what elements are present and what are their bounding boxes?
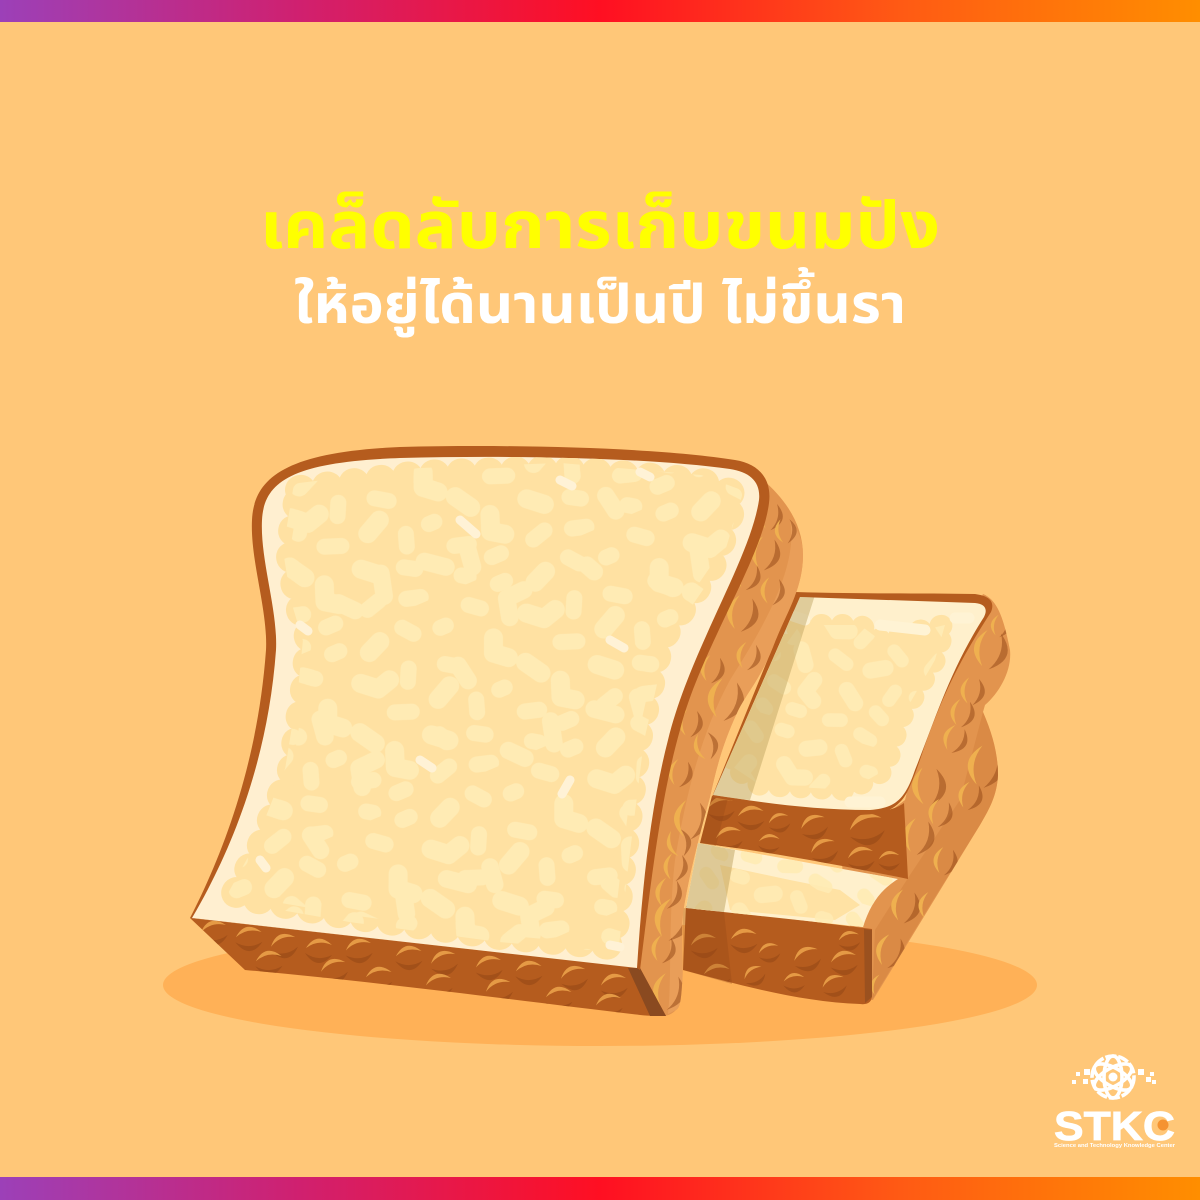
front slice crumb <box>235 470 735 947</box>
title <box>260 188 940 337</box>
back slices crust texture <box>867 613 1013 1000</box>
logo tagline: Science and Technology Knowledge Center <box>1054 1143 1176 1149</box>
illustration: front bread slice <box>190 446 803 1020</box>
back slices side crust <box>840 594 1010 1000</box>
bottom gradient bar <box>0 1177 1200 1200</box>
logo: STKC <box>1054 1056 1176 1149</box>
logo atom icon <box>1090 1056 1136 1098</box>
side crust texture <box>648 501 797 1013</box>
logo wordmark: STKC <box>1054 1103 1175 1149</box>
upper slice rim and face <box>712 592 992 815</box>
front slice rim <box>190 446 769 970</box>
title line 1: เคล็ดลับการเก็บขนมปัง <box>260 188 940 262</box>
upper slice front crust <box>700 796 908 879</box>
logo dot <box>1158 1120 1168 1130</box>
front slice side crust <box>620 466 803 1016</box>
illustration: stacked back bread slices <box>680 592 1013 1004</box>
top gradient bar <box>0 0 1200 22</box>
title line 2: ให้อยู่ได้นานเป็นปี ไม่ขึ้นรา <box>294 267 906 337</box>
front slice bottom crust <box>190 918 666 1016</box>
lower slice front crust <box>683 906 872 1004</box>
lower slice face <box>686 843 898 927</box>
bottom crust texture <box>202 920 628 1012</box>
logo pixel squares <box>1072 1069 1156 1084</box>
ground shadow <box>163 924 1037 1046</box>
front slice face <box>192 457 759 968</box>
